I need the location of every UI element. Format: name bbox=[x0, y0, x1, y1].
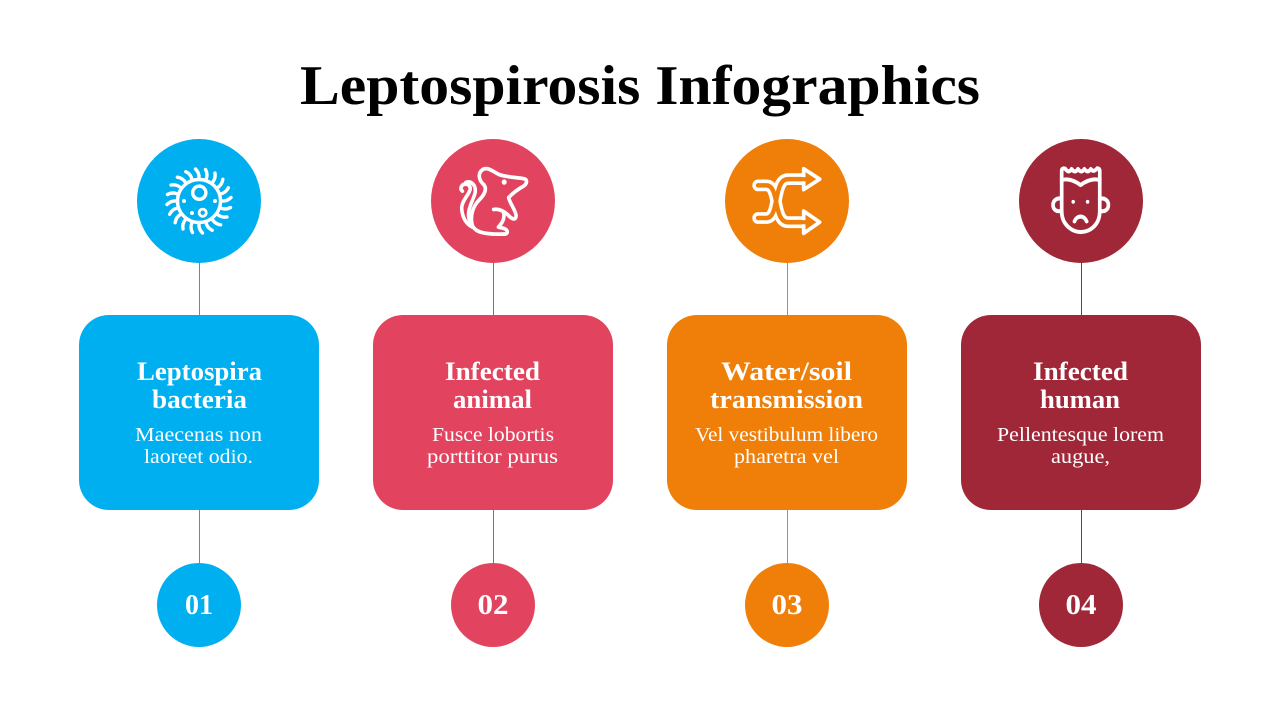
card: Infected human: human bbox=[1040, 385, 1121, 414]
card: Infected animal: Fusce lobortis bbox=[432, 424, 554, 446]
card: Leptospira bacteria bbox=[79, 315, 319, 510]
card: Infected animal: Infected bbox=[445, 357, 541, 386]
card: Water/soil transmission: pharetra vel bbox=[734, 446, 839, 468]
title: Leptospirosis Infographics bbox=[300, 55, 980, 117]
card: Water/soil transmission: Vel vestibulum libero bbox=[695, 424, 878, 446]
number badge 02: 02 bbox=[478, 590, 508, 621]
panel: step 2 Infected animal bbox=[373, 139, 613, 647]
card: Infected human bbox=[961, 315, 1201, 510]
panel: step 3 Water/soil transmission bbox=[667, 139, 907, 647]
card: Leptospira bacteria: bacteria bbox=[152, 385, 247, 414]
panel: step 4 Infected human bbox=[961, 139, 1201, 647]
card: Infected animal bbox=[373, 315, 613, 510]
number badge 02 bbox=[451, 563, 535, 647]
card: Water/soil transmission bbox=[667, 315, 907, 510]
card: Leptospira bacteria: Leptospira bbox=[137, 357, 262, 386]
number badge 03 bbox=[745, 563, 829, 647]
number badge 01: 01 bbox=[185, 590, 213, 621]
icon: shuffle arrows bbox=[758, 169, 820, 233]
card: Infected animal: porttitor purus bbox=[427, 446, 558, 468]
card: Water/soil transmission: transmission bbox=[710, 385, 864, 414]
card: Water/soil transmission: Water/soil bbox=[721, 357, 852, 386]
icon: bacteria bbox=[167, 169, 231, 233]
number badge 04: 04 bbox=[1066, 590, 1096, 621]
number badge 01 bbox=[157, 563, 241, 647]
card: Infected animal: animal bbox=[453, 385, 532, 414]
icon: sad face bbox=[1053, 168, 1108, 232]
number badge 04 bbox=[1039, 563, 1123, 647]
card: Leptospira bacteria: Maecenas non bbox=[135, 424, 262, 446]
card: Leptospira bacteria: laoreet odio. bbox=[144, 446, 253, 468]
card: Infected human: Pellentesque lorem bbox=[997, 424, 1164, 446]
card: Infected human: augue, bbox=[1051, 446, 1110, 468]
icon: rat bbox=[461, 169, 527, 234]
card: Infected human: Infected bbox=[1033, 357, 1129, 386]
panel: step 1 Leptospira bacteria bbox=[79, 139, 319, 647]
number badge 03: 03 bbox=[772, 590, 802, 621]
